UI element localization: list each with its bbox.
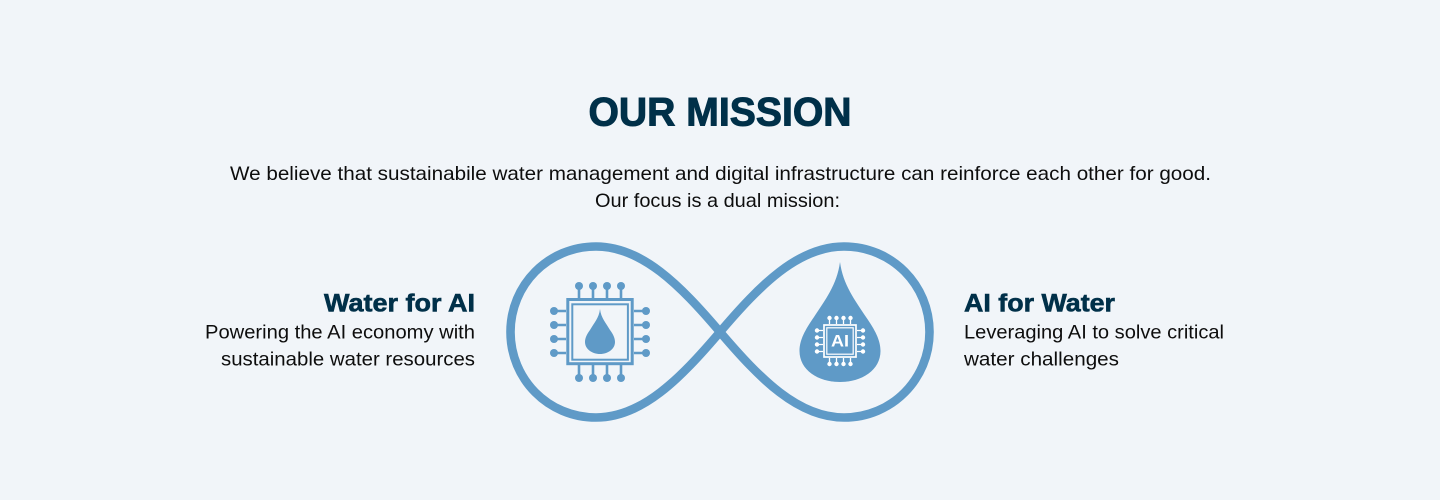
description: AI for water: water challenges xyxy=(963,348,1119,370)
panel: AI for water text xyxy=(963,290,1224,370)
heading: water for AI: Water for AI xyxy=(324,290,475,318)
title: OUR MISSION xyxy=(588,90,852,134)
intro text xyxy=(230,163,1211,212)
icon: water drop with AI chip xyxy=(800,262,880,382)
description: water for AI xyxy=(205,322,475,370)
panel: water for AI text xyxy=(205,290,475,370)
description: AI for water: Leveraging AI to solve critical xyxy=(964,322,1224,344)
icon: chip with water drop xyxy=(550,282,650,382)
icon: water drop with AI chip: AI xyxy=(831,333,849,351)
infinity loop xyxy=(510,246,930,418)
intro text: We believe that sustainabile water management and digital infrastructure can reinforce each other for good. xyxy=(230,163,1211,185)
description: water for AI: Powering the AI economy with xyxy=(205,322,475,344)
intro text: Our focus is a dual mission: xyxy=(595,190,840,212)
description: water for AI: sustainable water resources xyxy=(221,348,475,370)
heading: AI for water: AI for Water xyxy=(964,290,1115,318)
description: AI for water xyxy=(963,322,1224,370)
